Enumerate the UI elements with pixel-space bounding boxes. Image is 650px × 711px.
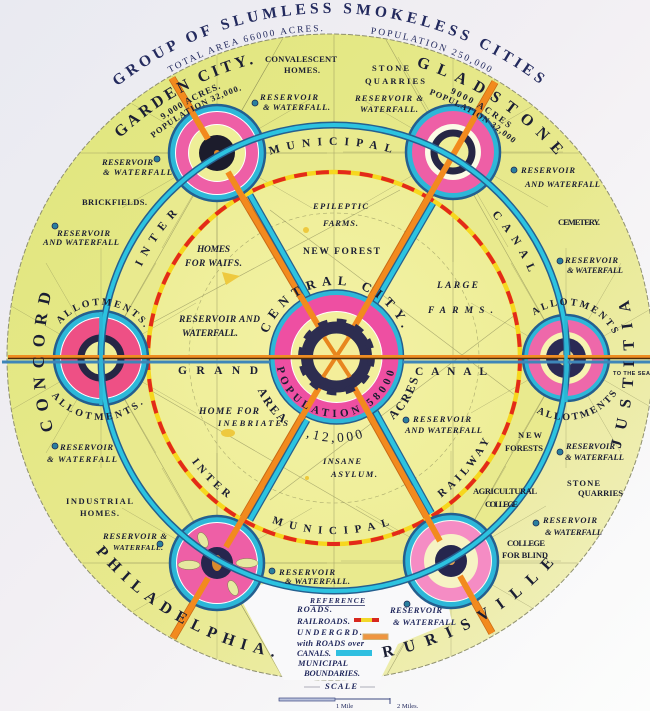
city: Concord xyxy=(54,311,148,405)
labels: reservoirs and waterfalls xyxy=(42,92,624,586)
labels: land uses outer belt: QUARRIES xyxy=(578,488,623,498)
city: Garden City xyxy=(169,105,265,201)
inter-municipal canal ring xyxy=(101,125,567,591)
labels: reservoirs and waterfalls: & WATERFALL xyxy=(103,167,172,177)
labels: land uses outer belt: CEMETERY. xyxy=(558,217,600,227)
labels: reservoirs and waterfalls: AND WATERFALL xyxy=(404,425,482,435)
city name: Gladstone: GLADSTONE xyxy=(418,58,564,155)
labels: reservoirs and waterfalls: & WATERFALL. xyxy=(263,102,330,112)
labels: reservoirs and waterfalls: RESERVOIR xyxy=(259,92,318,102)
city: Rurisville xyxy=(404,514,498,608)
canal label: inter: INTER xyxy=(134,210,178,266)
central railway crossing ring xyxy=(300,294,373,421)
legend: & WATERFALL xyxy=(393,617,456,627)
main line railway and canal xyxy=(2,356,650,362)
labels: land uses outer belt: NEW xyxy=(518,430,542,440)
allotments: Justitia top: ALLOTMENTS xyxy=(533,298,618,333)
central city name: CENTRAL CITY. xyxy=(261,276,406,332)
Gladstone acres: 9000 ACRES xyxy=(450,88,512,128)
canal spokes xyxy=(250,195,433,520)
railway label: railway: RAILWAY xyxy=(436,437,488,498)
subtitle: area: TOTAL AREA 66000 ACRES. xyxy=(167,25,322,72)
labels: reservoirs and waterfalls: RESERVOIR & xyxy=(354,93,423,103)
labels: reservoirs and waterfalls: RESERVOIR xyxy=(59,442,113,452)
legend: MUNICIPAL xyxy=(297,658,348,668)
labels: central estate: INEBRIATES xyxy=(217,418,288,428)
labels: reservoirs and waterfalls: & WATERFALL. xyxy=(285,576,350,586)
labels: land uses outer belt: HOMES. xyxy=(80,508,119,518)
city cross canals xyxy=(101,312,566,405)
labels: reservoirs and waterfalls: & WATERFALL xyxy=(567,265,623,275)
panel: legend wedge xyxy=(243,583,452,680)
labels: land uses outer belt: CONVALESCENT xyxy=(265,54,337,64)
labels: central estate: FOR WAIFS. xyxy=(184,259,242,269)
central gear xyxy=(302,322,372,392)
central acres label: ACRES xyxy=(390,378,418,420)
labels: central estate xyxy=(178,201,493,479)
labels: land uses outer belt: STONE xyxy=(372,63,409,73)
labels: land uses outer belt: QUARRIES xyxy=(365,76,425,86)
labels: reservoirs and waterfalls: RESERVOIR & xyxy=(102,531,167,541)
city name: Garden City: GARDEN CITY. xyxy=(116,55,253,136)
labels: reservoirs and waterfalls: RESERVOIR xyxy=(412,414,471,424)
grand canal label right: CANAL xyxy=(415,366,487,378)
city name: Rurisville: RURISVILLE xyxy=(381,557,554,658)
central area label: AREA xyxy=(258,390,285,423)
inner hub xyxy=(314,334,360,380)
labels: reservoirs and waterfalls: RESERVOIR xyxy=(278,567,335,577)
labels: land uses outer belt: STONE xyxy=(567,478,600,488)
allotments: Concord bottom: ALLOTMENTS. xyxy=(52,393,142,420)
subtitle: population: POPULATION 250,000 xyxy=(370,27,492,72)
labels: reservoirs and waterfalls: & WATERFALL xyxy=(47,454,117,464)
labels: land uses outer belt: COLLEGE xyxy=(485,499,518,509)
labels: central estate: EPILEPTIC xyxy=(312,201,368,211)
central city population: POPULATION 58000 xyxy=(276,366,394,417)
railway ring xyxy=(148,172,520,544)
city: Philadelphia xyxy=(170,516,264,610)
labels: land uses outer belt: FOR BLIND xyxy=(502,550,548,560)
labels: reservoirs and waterfalls: AND WATERFALL xyxy=(42,237,119,247)
scale bar: 1 Mile xyxy=(336,703,353,710)
central city rings xyxy=(270,290,404,424)
railway spokes xyxy=(172,78,495,638)
labels: central estate: INSANE xyxy=(322,456,361,466)
scale bar: SCALE xyxy=(325,681,357,691)
panel: central estate interior xyxy=(148,172,520,544)
labels: reservoirs and waterfalls: RESERVOIR xyxy=(564,255,618,265)
scale bar: 2 Miles. xyxy=(397,703,419,710)
legend: UNDERGRD. xyxy=(297,627,362,637)
labels: central estate: HOME FOR xyxy=(198,407,259,417)
labels: reservoirs and waterfalls: RESERVOIR xyxy=(520,165,575,175)
labels: land uses outer belt: HOMES. xyxy=(284,65,320,75)
Gladstone population: POPULATION 32,000 xyxy=(429,88,516,142)
labels: central estate: RESERVOIR AND xyxy=(178,315,260,325)
central area figure: ,12,000 xyxy=(306,430,362,444)
railway label: municipal: MUNICIPAL xyxy=(272,516,389,534)
labels: reservoirs and waterfalls: RESERVOIR xyxy=(565,441,615,451)
labels: reservoirs and waterfalls: RESERVOIR xyxy=(101,157,153,167)
labels: land uses outer belt xyxy=(66,54,650,560)
labels: central estate: HOMES xyxy=(196,245,230,255)
reservoir markers xyxy=(52,100,563,607)
allotments: Justitia bottom: ALLOTMENTS xyxy=(536,390,616,420)
labels: land uses outer belt: FORESTS xyxy=(505,443,543,453)
Garden City acres: 9,000 ACRES. xyxy=(160,84,220,120)
legend: REFERENCE xyxy=(309,596,365,605)
scale bar xyxy=(279,681,419,710)
legend: RESERVOIR xyxy=(389,605,442,615)
legend: ROADS. xyxy=(296,604,332,614)
legend: CANALS. xyxy=(297,648,331,658)
Garden City population: POPULATION 32,000. xyxy=(150,86,241,138)
labels: central estate: ASYLUM. xyxy=(330,469,377,479)
labels: central estate: WATERFALL. xyxy=(182,329,238,339)
labels: land uses outer belt: BRICKFIELDS. xyxy=(82,197,147,207)
city name: Philadelphia: PHILADELPHIA. xyxy=(96,544,274,657)
canal label: canal: CANAL xyxy=(494,212,534,272)
re-drawn railway over city rings xyxy=(172,78,495,638)
thin estate boundary lines xyxy=(80,35,580,676)
labels: reservoirs and waterfalls: AND WATERFALL xyxy=(524,179,600,189)
labels: reservoirs and waterfalls: & WATERFALL xyxy=(545,527,602,537)
labels: reservoirs and waterfalls: WATERFALL. xyxy=(113,543,163,552)
labels: reservoirs and waterfalls: RESERVOIR xyxy=(56,228,110,238)
labels: central estate: FARMS. xyxy=(322,218,358,228)
labels: reservoirs and waterfalls: RESERVOIR xyxy=(542,515,597,525)
labels: land uses outer belt: TO THE SEA xyxy=(613,371,650,377)
grand canal label: GRAND xyxy=(178,365,258,377)
panel: inter-municipal ring interior xyxy=(101,125,567,591)
legend: RAILROADS. xyxy=(296,616,350,626)
labels: land uses outer belt: AGRICULTURAL xyxy=(473,486,537,496)
canal label: municipal: MUNICIPAL xyxy=(268,137,392,155)
city: Justitia xyxy=(523,315,609,401)
labels: central estate: LARGE xyxy=(436,281,478,291)
small yellow reservoir marks xyxy=(221,227,309,480)
labels: central estate: NEW FOREST xyxy=(303,247,381,257)
legend: with ROADS over xyxy=(297,638,365,648)
allotments: Concord top: ALLOTMENTS. xyxy=(57,298,146,327)
railway label: inter: INTER xyxy=(192,458,230,498)
labels: reservoirs and waterfalls: & WATERFALL xyxy=(565,452,624,462)
city: Gladstone xyxy=(406,105,500,199)
title: GROUP OF SLUMLESS SMOKELESS CITIES xyxy=(114,2,545,84)
city name: Justitia: JUSTITIA xyxy=(611,300,634,448)
labels: central estate: FARMS. xyxy=(427,306,493,316)
labels: reservoirs and waterfalls: WATERFALL. xyxy=(360,104,418,114)
city name: Concord: CONCORD xyxy=(33,292,52,432)
labels: land uses outer belt: INDUSTRIAL xyxy=(66,496,133,506)
labels: land uses outer belt: COLLEGE xyxy=(507,538,545,548)
legend xyxy=(296,596,456,678)
legend: BOUNDARIES. xyxy=(303,668,360,678)
